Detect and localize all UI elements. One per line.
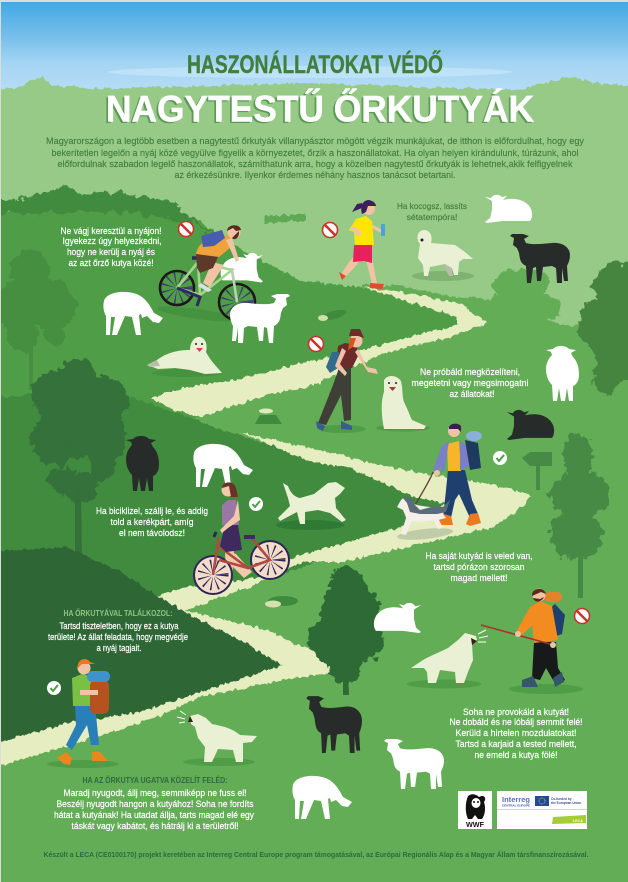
dog standing — [412, 230, 474, 281]
signpost — [522, 452, 552, 490]
text: dog approaching: Beszélj nyugodt hangon a kutyához! Soha ne fordíts — [56, 799, 254, 809]
text: meeting a guard dog — [48, 621, 188, 653]
title line two: NAGYTESTŰ ŐRKUTYÁK — [104, 89, 532, 131]
intro text: az érkezésünkre. Ilyenkor érdemes néhány hasznos tanácsot betartani. — [174, 169, 456, 180]
text: jogging: Ha kocogsz, lassíts — [397, 201, 467, 211]
check hiker — [47, 681, 61, 695]
bush, background — [486, 269, 562, 326]
man with stick — [481, 588, 583, 694]
sheep grazing — [103, 292, 163, 335]
heading: meeting a guard dog: HA ŐRKUTYÁVAL TALÁLKOZOL: — [64, 607, 172, 618]
text: never provoke — [450, 707, 582, 760]
title line two: NAGYTESTŰ ŐRKUTYÁK — [106, 88, 534, 130]
darkest hill — [0, 547, 282, 746]
text: own dog: tartsd pórázon szorosan — [434, 562, 524, 572]
text: meeting a guard dog: a nyáj tagjait. — [96, 643, 142, 653]
black sheep bottom — [306, 696, 362, 753]
sheep lying top — [485, 195, 532, 223]
check woman — [249, 497, 263, 511]
check man — [493, 451, 507, 465]
logo: WWF — [458, 791, 492, 829]
text: do not cross the flock: az azt őrző kutya közé! — [68, 258, 154, 268]
small log — [318, 308, 348, 322]
no sign cyclist — [178, 222, 194, 236]
text: jogging — [397, 201, 467, 222]
intro text — [46, 135, 584, 180]
text: bicycle: told a kerékpárt, amíg — [110, 517, 194, 527]
black sheep top — [510, 234, 570, 283]
dark bush centre — [308, 567, 384, 695]
text: dog approaching: Maradj nyugodt, állj meg, semmiképp ne fuss el! — [64, 788, 246, 798]
sheep lying behind cyclist — [221, 253, 263, 282]
text: never provoke: Ne dobáld és ne lóbálj semmit felé! — [450, 717, 582, 727]
tree stump — [255, 408, 282, 424]
text: own dog — [426, 551, 532, 583]
text: bicycle: el nem távolodsz! — [119, 528, 185, 538]
text: meeting a guard dog: Tartsd tiszteletben, hogy ez a kutya — [60, 621, 178, 631]
title line one: HASZONÁLLATOKAT VÉDŐ — [187, 50, 443, 79]
running dog — [276, 482, 346, 530]
tree middle — [31, 360, 128, 562]
sheep standing — [230, 294, 290, 343]
text: meeting a guard dog: területe! Az állat feladata, hogy megvédje — [48, 632, 188, 642]
sheep grazing bottom — [292, 776, 352, 819]
logo: Interreg: LECA — [573, 819, 583, 823]
top hedge — [0, 186, 240, 252]
white sheep bottom right — [384, 739, 444, 789]
lower left hill — [0, 392, 531, 660]
text: do not approach — [412, 367, 528, 399]
text: own dog: Ha saját kutyád is veled van, — [426, 551, 532, 561]
small dog on leash — [397, 497, 450, 535]
barking dog left — [177, 711, 257, 766]
tree right upper — [578, 263, 628, 394]
sheep lying centre — [374, 603, 421, 633]
text: never provoke: Tartsd a karjaid a tested mellett, — [456, 739, 576, 749]
tree right lower — [549, 434, 610, 598]
white sheep right — [546, 346, 579, 401]
logo: Interreg: the European Union — [551, 801, 581, 805]
cloud — [108, 66, 512, 78]
text: own dog: magad mellett! — [450, 573, 508, 583]
intro text: Magyarországon a legtöbb esetben a nagytestű őrkutyák villanypásztor mögött végzik munkájukat, de itthon is előfordulhat, hogy egy — [46, 135, 584, 146]
text: never provoke: Kerüld a hirtelen mozdulatokat! — [456, 728, 576, 738]
no sign jogger — [322, 222, 338, 238]
text: do not cross the flock: Igyekezz úgy helyezkedni, — [62, 236, 162, 246]
no sign woman — [308, 336, 324, 352]
text: dog approaching: hátat a kutyának! Ha utadat állja, tarts magad elé egy — [54, 810, 254, 820]
logo: Interreg: Interreg — [502, 797, 530, 804]
logo: Interreg: CENTRAL EUROPE — [502, 804, 530, 808]
logo: WWF: WWF — [466, 822, 485, 829]
rock — [265, 596, 298, 608]
text: do not approach: az állatokat! — [450, 389, 494, 399]
black sheep front — [126, 436, 159, 491]
text: do not cross the flock — [60, 226, 162, 268]
heading: dog approaching: HA AZ ŐRKUTYA UGATVA KÖZELÍT FELÉD: — [82, 774, 228, 785]
text: do not cross the flock: hogy ne kerülj a nyáj és — [67, 247, 155, 257]
dog sitting — [376, 376, 430, 432]
cyclist — [156, 225, 255, 325]
text: never provoke: Soha ne provokáld a kutyát! — [463, 707, 569, 717]
path two — [158, 432, 531, 612]
path one — [150, 288, 487, 417]
field, mid green — [0, 285, 628, 882]
logo: Interreg: Co-funded by — [551, 797, 572, 801]
hiker green shirt — [47, 659, 119, 768]
man with own dog — [397, 424, 482, 542]
text: dog approaching — [54, 788, 254, 831]
woman with bicycle — [194, 482, 289, 594]
logo: Interreg — [497, 791, 587, 829]
sky — [0, 0, 628, 98]
text: bicycle: Ha biciklizel, szállj le, és addig — [96, 506, 208, 516]
text: do not approach: megetetni vagy megsimogatni — [412, 378, 528, 388]
tree left — [0, 250, 76, 390]
small bush top — [264, 214, 306, 224]
text: dog approaching: táskát vagy kabátot, és hátrálj ki a területről! — [72, 821, 238, 831]
text: jogging: sétatempóra! — [406, 212, 458, 222]
path three — [0, 596, 330, 770]
intro text: bekerítetlen legelőn a nyáj közé vegyülve figyelik a környezetet, őrzik a haszonállatokat. Ha olyan helyen kirándulunk, túrázunk, ahol — [52, 147, 578, 158]
no sign stick — [574, 608, 590, 624]
intro text: előfordulnak szabadon legelő haszonállatok, számíthatunk arra, hogy a közelben nagytestű őrkutyák is lehetnek,akik felfigyelnek — [58, 158, 573, 169]
text: never provoke: ne emeld a kutya fölé! — [474, 750, 558, 760]
text: bicycle — [96, 506, 208, 538]
text: do not cross the flock: Ne vágj keresztül a nyájon! — [60, 226, 162, 236]
black sheep lying — [507, 410, 554, 440]
jogger — [339, 200, 385, 289]
text: do not approach: Ne próbáld megközelíteni, — [420, 367, 520, 377]
upper hill — [0, 205, 487, 450]
hiker woman — [316, 329, 378, 433]
sheep grazing middle — [193, 444, 253, 487]
barking dog right — [407, 630, 488, 688]
dog lying — [147, 337, 222, 377]
